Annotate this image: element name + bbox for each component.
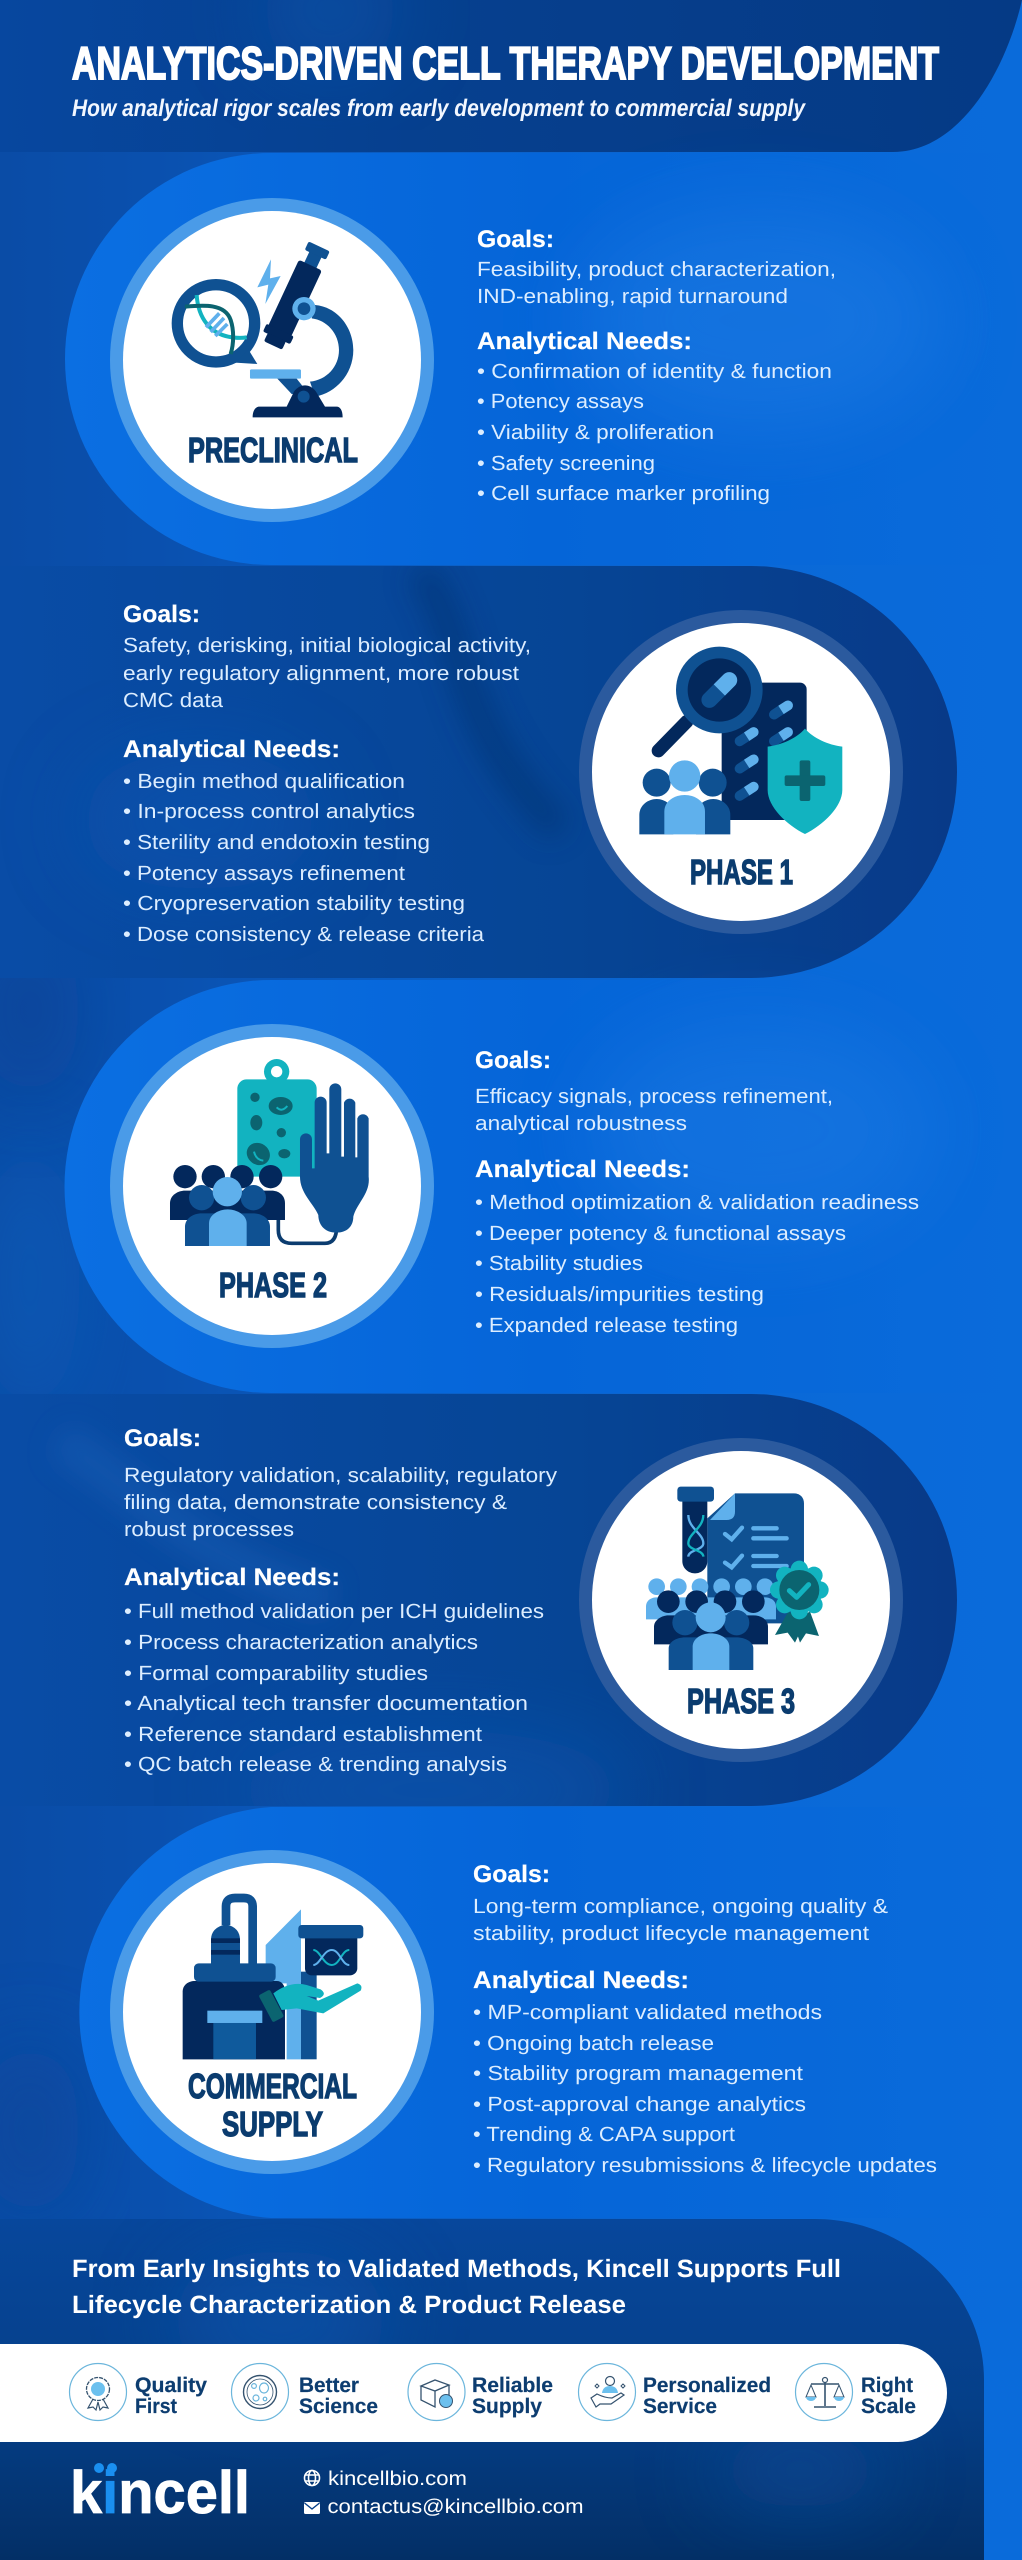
benefit: reliable supply xyxy=(408,2364,553,2420)
text: preclinical goals: IND-enabling, rapid turnaround xyxy=(477,285,788,308)
label: supply: SUPPLY xyxy=(222,2105,323,2144)
text: phase 1 analytical needs: • Sterility and endotoxin testing xyxy=(123,831,430,854)
text: phase 3 analytical needs: • Formal comparability studies xyxy=(124,1662,428,1685)
benefit: better science: Better xyxy=(299,2374,359,2397)
contact details xyxy=(304,2468,584,2518)
text: commercial goals: Goals: xyxy=(473,1861,550,1888)
text: phase 3 analytical needs: • Reference standard establishment xyxy=(124,1723,482,1746)
text: phase 2 goals: Goals: xyxy=(475,1047,551,1074)
benefit: reliable supply: Reliable xyxy=(472,2374,553,2397)
benefit: personalized service xyxy=(578,2364,771,2420)
text: phase 3 goals xyxy=(124,1425,558,1541)
text: phase 1 goals xyxy=(123,601,531,712)
text: phase 1 analytical needs: Analytical Needs: xyxy=(123,736,340,763)
panel: phase 3 xyxy=(50,1394,957,1806)
text: phase 2 goals: analytical robustness xyxy=(475,1112,687,1135)
text: phase 2 goals xyxy=(475,1047,833,1135)
text: commercial analytical needs xyxy=(473,1967,937,2177)
benefit: right scale: Scale xyxy=(861,2395,916,2418)
text: phase 2 analytical needs: • Residuals/impurities testing xyxy=(475,1283,764,1306)
text: email: contactus@kincellbio.com xyxy=(328,2496,584,2518)
text: commercial analytical needs: • Post-approval change analytics xyxy=(473,2093,806,2116)
icon: bioreactor, jar and hand xyxy=(183,1898,363,2059)
label: commercial: COMMERCIAL xyxy=(188,2067,357,2106)
text: phase 3 goals: Goals: xyxy=(124,1425,201,1452)
text: phase 1 analytical needs xyxy=(123,736,485,946)
text: phase 2 analytical needs: • Method optimization & validation readiness xyxy=(475,1191,919,1214)
benefit: better science: Science xyxy=(299,2395,378,2418)
text: phase 2 analytical needs: • Expanded release testing xyxy=(475,1314,738,1337)
icon: test tube, checklist, badge and people xyxy=(646,1487,829,1670)
closing statement: From Early Insights to Validated Methods, Kincell Supports Full xyxy=(72,2255,841,2283)
text: preclinical analytical needs xyxy=(477,328,832,505)
benefit: right scale xyxy=(796,2364,916,2420)
text: phase 1 goals: Safety, derisking, initial biological activity, xyxy=(123,634,531,657)
label: preclinical: PRECLINICAL xyxy=(188,431,358,470)
text: phase 3 goals: filing data, demonstrate consistency & xyxy=(124,1491,507,1514)
panel: phase 1 xyxy=(0,566,957,978)
text: phase 3 analytical needs: • Analytical tech transfer documentation xyxy=(124,1692,528,1715)
text: phase 3 analytical needs: • Full method validation per ICH guidelines xyxy=(124,1600,544,1623)
text: preclinical analytical needs: • Viability & proliferation xyxy=(477,421,714,444)
panel: preclinical xyxy=(65,153,1022,565)
text: commercial analytical needs: • Stability program management xyxy=(473,2062,803,2085)
icon: mail xyxy=(304,2502,320,2514)
benefit: reliable supply: Supply xyxy=(472,2395,542,2418)
text: preclinical goals: Feasibility, product characterization, xyxy=(477,258,836,281)
panel: commercial supply xyxy=(79,1807,1022,2218)
text: preclinical goals xyxy=(477,226,836,308)
text: phase 1 goals: early regulatory alignment, more robust xyxy=(123,662,519,685)
text: phase 1 analytical needs: • Potency assays refinement xyxy=(123,862,405,885)
icon: microscope and DNA xyxy=(177,240,353,417)
text: preclinical analytical needs: • Safety screening xyxy=(477,452,655,475)
text: preclinical goals: Goals: xyxy=(477,226,554,253)
footer panel xyxy=(0,2219,984,2560)
text: phase 2 analytical needs: • Stability studies xyxy=(475,1252,643,1275)
benefit: quality first xyxy=(70,2364,207,2420)
icon: cell bag, hand and people xyxy=(170,1059,369,1246)
label: phase 3: PHASE 3 xyxy=(687,1682,795,1721)
text: phase 3 analytical needs: Analytical Needs: xyxy=(124,1564,340,1591)
text: commercial goals: Long-term compliance, ongoing quality & xyxy=(473,1895,888,1918)
text: preclinical analytical needs: • Potency assays xyxy=(477,390,644,413)
icon: globe xyxy=(304,2470,320,2486)
text: commercial goals xyxy=(473,1861,888,1945)
benefit: better science xyxy=(232,2364,378,2420)
benefit: right scale: Right xyxy=(861,2374,913,2397)
text: phase 1 analytical needs: • Begin method qualification xyxy=(123,770,405,793)
text: website: kincellbio.com xyxy=(328,2468,467,2490)
text: phase 3 analytical needs xyxy=(124,1564,544,1776)
header banner xyxy=(0,0,1022,152)
text: commercial analytical needs: • Regulatory resubmissions & lifecycle updates xyxy=(473,2154,937,2177)
text: commercial analytical needs: Analytical Needs: xyxy=(473,1967,689,1994)
benefit: quality first: Quality xyxy=(135,2374,207,2397)
text: commercial analytical needs: • Ongoing batch release xyxy=(473,2032,714,2055)
benefit: personalized service: Service xyxy=(643,2395,717,2418)
text: phase 1 goals: Goals: xyxy=(123,601,200,628)
text: phase 2 analytical needs xyxy=(475,1156,919,1337)
text: phase 1 analytical needs: • Dose consistency & release criteria xyxy=(123,923,485,946)
subtitle: How analytical rigor scales from early development to commercial supply xyxy=(72,95,806,122)
text: phase 2 analytical needs: Analytical Needs: xyxy=(475,1156,690,1183)
closing statement: Lifecycle Characterization & Product Release xyxy=(72,2291,626,2319)
text: commercial analytical needs: • MP-compliant validated methods xyxy=(473,2001,822,2024)
label: phase 1: PHASE 1 xyxy=(690,853,793,892)
text: phase 1 analytical needs: • Cryopreservation stability testing xyxy=(123,892,465,915)
text: phase 3 analytical needs: • QC batch release & trending analysis xyxy=(124,1753,507,1776)
benefit: quality first: First xyxy=(135,2395,177,2418)
text: phase 2 goals: Efficacy signals, process refinement, xyxy=(475,1085,833,1108)
text: phase 1 analytical needs: • In-process control analytics xyxy=(123,800,415,823)
text: phase 3 goals: robust processes xyxy=(124,1518,294,1541)
text: phase 3 goals: Regulatory validation, scalability, regulatory xyxy=(124,1464,558,1487)
text: phase 1 goals: CMC data xyxy=(123,689,224,712)
label: phase 2: PHASE 2 xyxy=(219,1266,327,1305)
text: phase 3 analytical needs: • Process characterization analytics xyxy=(124,1631,478,1654)
text: preclinical analytical needs: • Cell surface marker profiling xyxy=(477,482,770,505)
text: preclinical analytical needs: • Confirmation of identity & function xyxy=(477,360,832,383)
text: commercial analytical needs: • Trending & CAPA support xyxy=(473,2123,735,2146)
text: preclinical analytical needs: Analytical Needs: xyxy=(477,328,692,355)
text: phase 2 analytical needs: • Deeper potency & functional assays xyxy=(475,1222,846,1245)
text: commercial goals: stability, product lifecycle management xyxy=(473,1922,869,1945)
benefits bar xyxy=(0,2344,947,2442)
closing statement xyxy=(72,2255,841,2319)
panel: phase 2 xyxy=(65,980,1022,1393)
icon: pills, magnifier, people and shield xyxy=(639,647,842,834)
benefit: personalized service: Personalized xyxy=(643,2374,771,2397)
logo: kincell: kincell xyxy=(70,2459,250,2526)
